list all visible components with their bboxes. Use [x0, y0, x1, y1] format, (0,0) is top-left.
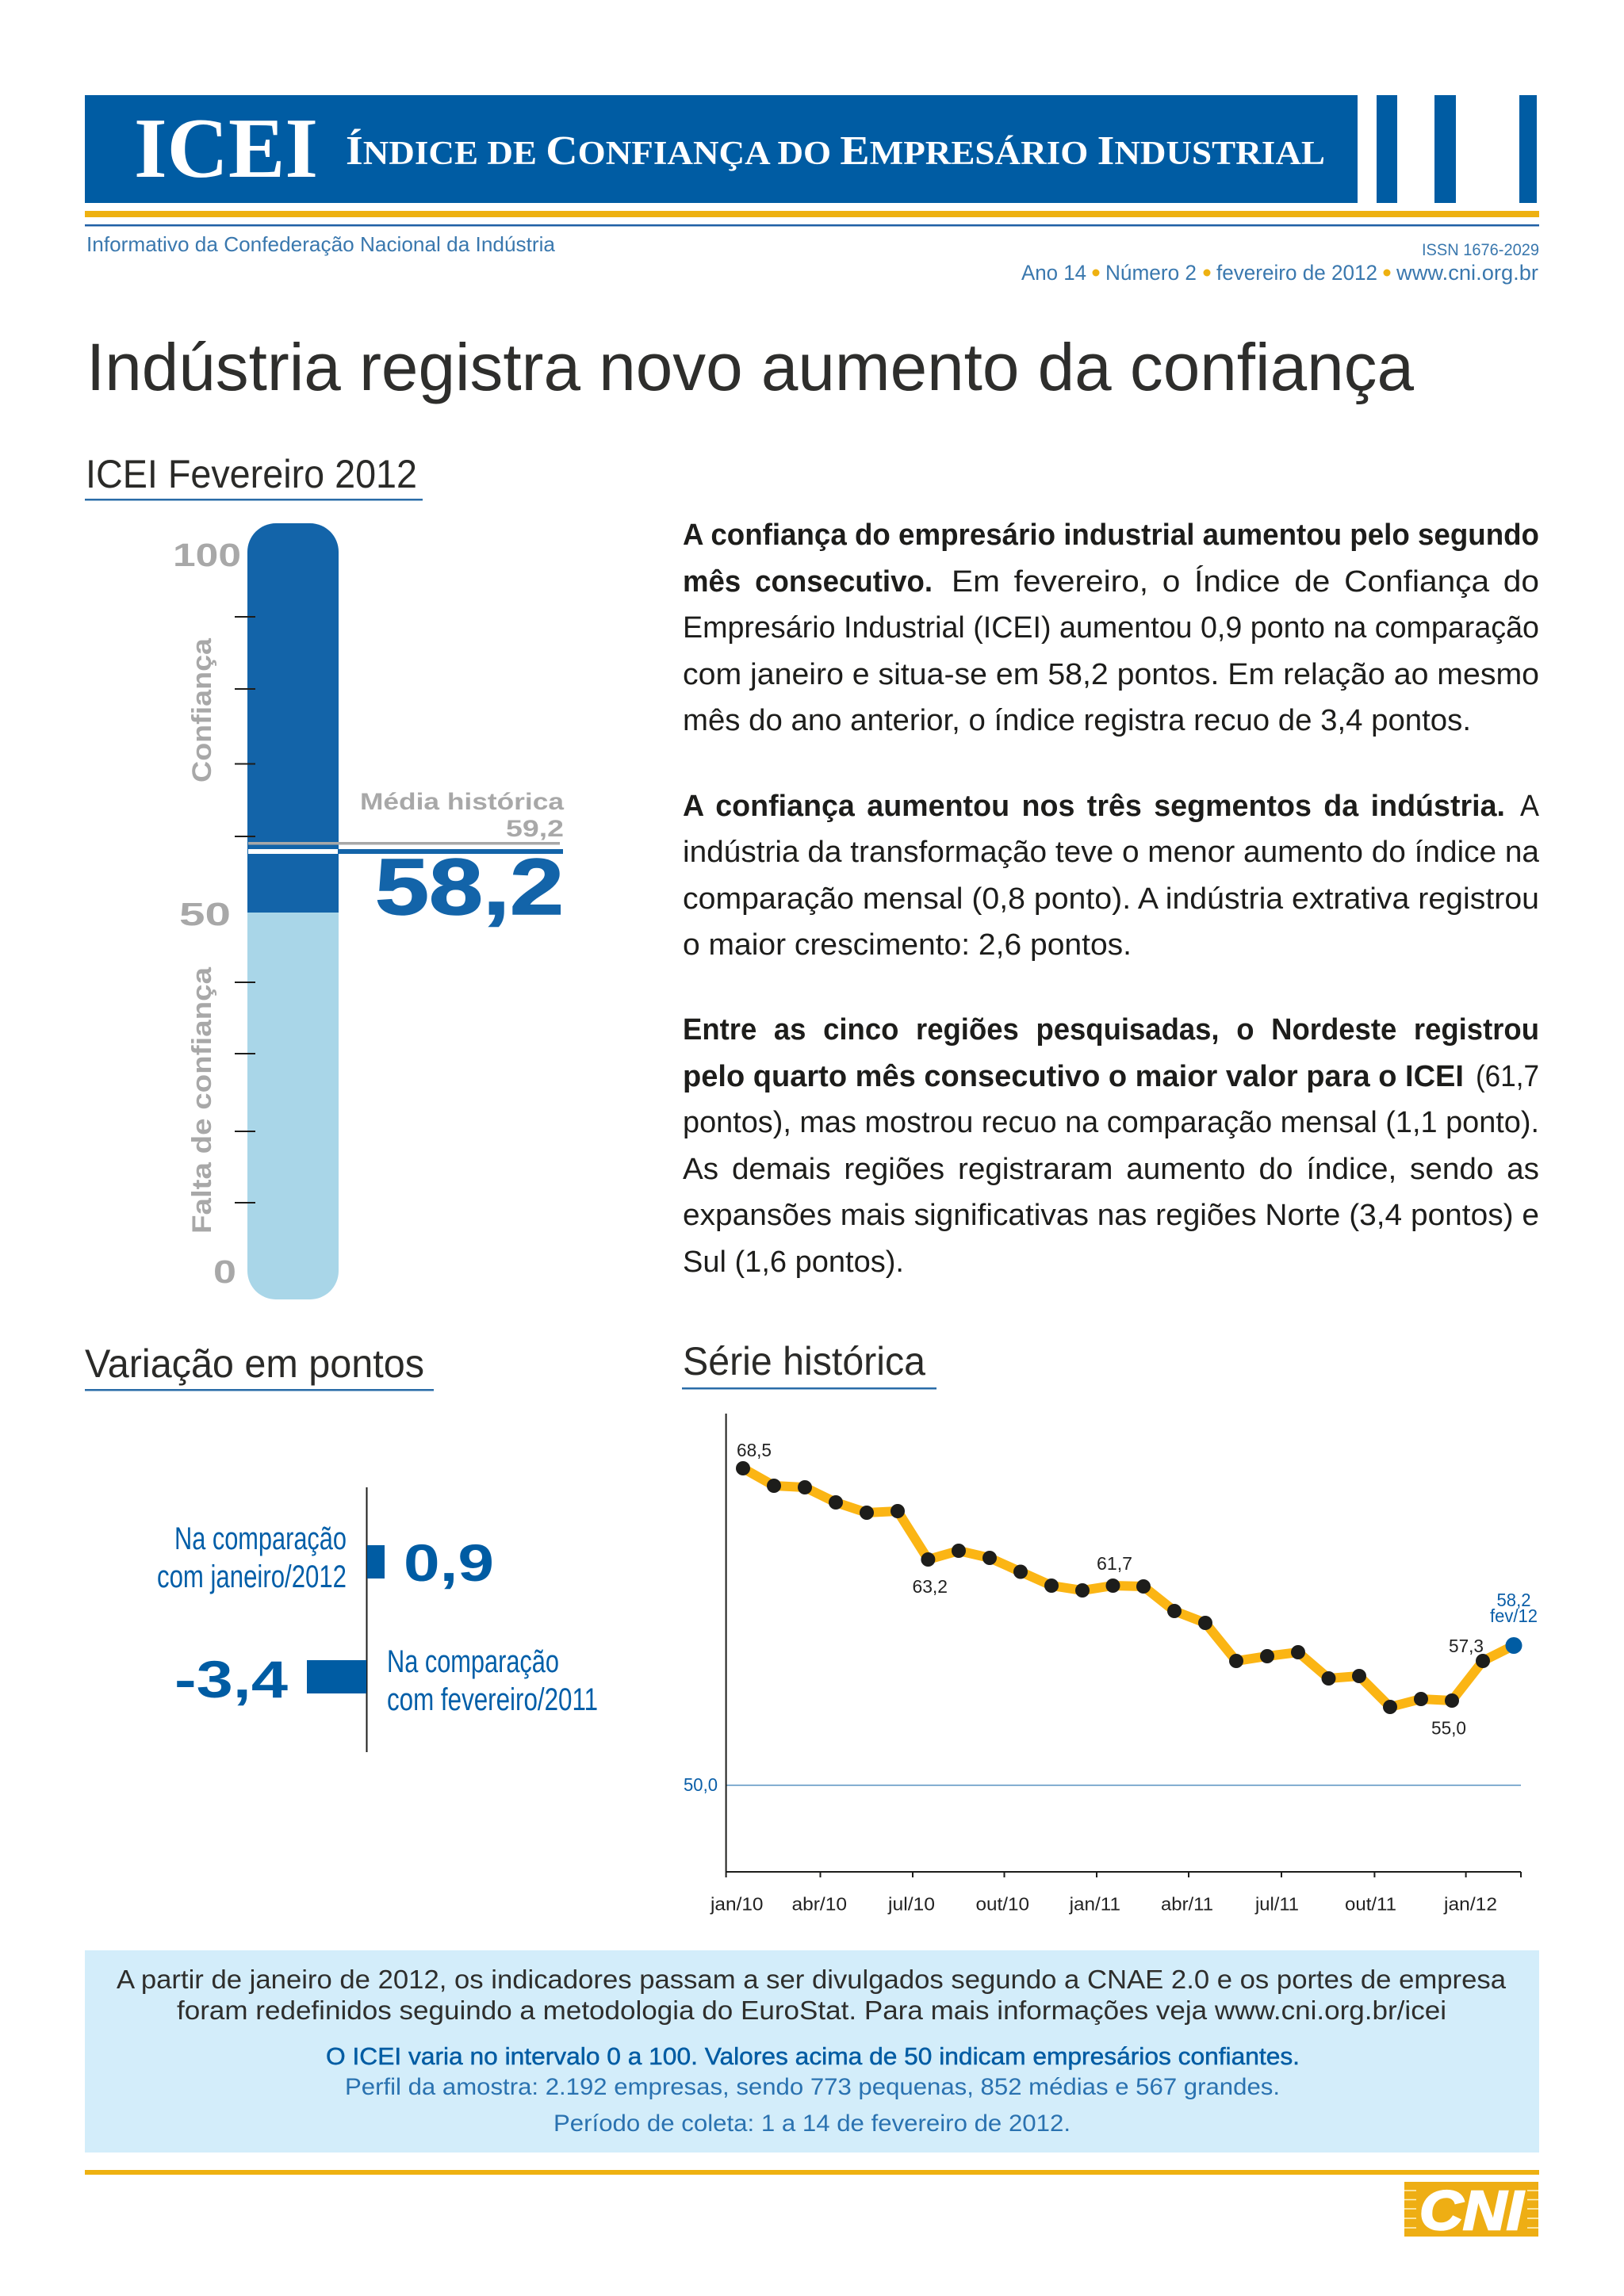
issue line	[1021, 261, 1538, 285]
data points	[736, 1461, 1490, 1714]
paragraph 3: Sul (1,6 pontos).	[683, 1246, 904, 1279]
paragraph 3: As demais regiões registraram aumento do índice, sendo as	[683, 1153, 1539, 1186]
paragraph 2: indústria da transformação teve o menor aumento do índice na	[683, 836, 1540, 869]
value 59,2: 59,2	[506, 816, 564, 842]
x axis labels: jan/10	[710, 1893, 763, 1914]
label: comparison with January 2012: Na comparação	[174, 1521, 347, 1556]
x axis labels: jul/11	[1254, 1893, 1299, 1914]
CNI logo: CNI	[1419, 2179, 1525, 2241]
data labels: 61,7	[1097, 1553, 1132, 1574]
issue line: Número 2	[1105, 261, 1197, 285]
label: comparison with January 2012	[157, 1521, 347, 1594]
thermometer gauge	[173, 523, 564, 1299]
data labels: 58,2	[1497, 1590, 1530, 1610]
current value line	[248, 849, 338, 854]
header rules	[85, 211, 1539, 227]
paragraph 3	[683, 1013, 1539, 1279]
series line	[743, 1468, 1514, 1707]
axes	[726, 1414, 1521, 1877]
main title: Indústria registra novo aumento da confiança	[86, 330, 1414, 404]
paragraph 2: A	[1520, 790, 1540, 823]
data labels: 63,2	[912, 1576, 948, 1597]
paragraph 1	[683, 519, 1539, 737]
paragraph 3: pontos), mas mostrou recuo na comparação mensal (1,1 ponto).	[683, 1106, 1539, 1139]
body text	[683, 519, 1540, 1279]
issue line: fevereiro de 2012	[1216, 261, 1377, 285]
axis label: confianca: Confiança	[187, 637, 217, 783]
paragraph 3: (61,7	[1476, 1060, 1539, 1093]
x axis labels: jul/10	[887, 1893, 935, 1914]
data labels: 50,0	[684, 1774, 718, 1795]
paragraph 3: Entre as cinco regiões pesquisadas, o Nordeste registrou	[683, 1013, 1539, 1047]
data labels: 55,0	[1431, 1717, 1466, 1738]
collection period: Período de coleta: 1 a 14 de fevereiro de 2012.	[553, 2110, 1071, 2137]
value -3,4: -3,4	[174, 1650, 288, 1709]
value 0,9: 0,9	[404, 1533, 494, 1592]
paragraph 1: com janeiro e situa-se em 58,2 pontos. Em relação ao mesmo	[683, 658, 1539, 691]
paragraph 2: comparação mensal (0,8 ponto). A indústria extrativa registrou	[683, 882, 1539, 916]
bar +0,9	[367, 1545, 385, 1578]
data labels: 57,3	[1449, 1636, 1484, 1656]
paragraph 1: Empresário Industrial (ICEI) aumentou 0,9 ponto na comparação	[683, 611, 1539, 645]
paragraph 1: A confiança do empresário industrial aumentou pelo segundo	[683, 519, 1539, 552]
footer rule	[85, 2170, 1539, 2175]
scale 100: 100	[173, 537, 241, 573]
value 58,2: 58,2	[375, 843, 564, 932]
publisher line: Informativo da Confederação Nacional da Indústria	[86, 232, 556, 256]
label: comparison with February 2011	[387, 1644, 598, 1717]
data labels	[684, 1440, 1538, 1795]
paragraph 3: expansões mais significativas nas regiões Norte (3,4 pontos) e	[683, 1199, 1539, 1232]
heading: Serie historica: Série histórica	[683, 1339, 925, 1383]
label: media historica: Média histórica	[360, 789, 564, 815]
issue line: Ano 14	[1021, 261, 1086, 285]
x axis labels: abr/10	[791, 1893, 847, 1914]
x axis labels: abr/11	[1161, 1893, 1213, 1914]
historical mean line	[248, 842, 560, 845]
paragraph 1: Em fevereiro, o Índice de Confiança do	[952, 564, 1539, 599]
heading: ICEI Fevereiro 2012: ICEI Fevereiro 2012	[86, 452, 417, 496]
data labels: fev/12	[1490, 1605, 1538, 1626]
paragraph 1: mês do ano anterior, o índice registra recuo de 3,4 pontos.	[683, 704, 1471, 737]
scale 50: 50	[179, 896, 231, 932]
label: comparison with January 2012: com janeiro/2012	[157, 1559, 347, 1594]
ISSN: ISSN 1676-2029	[1422, 241, 1539, 259]
x axis labels: jan/12	[1443, 1893, 1497, 1914]
index range note: O ICEI varia no intervalo 0 a 100. Valores acima de 50 indicam empresários confiantes.	[326, 2042, 1300, 2070]
header banner	[85, 95, 1537, 203]
diverging bar chart: variation	[157, 1487, 598, 1752]
paragraph 3: pelo quarto mês consecutivo o maior valor para o ICEI	[683, 1060, 1464, 1093]
sample profile: Perfil da amostra: 2.192 empresas, sendo 773 pequenas, 852 médias e 567 grandes.	[345, 2074, 1280, 2100]
label: comparison with February 2011: com fevereiro/2011	[387, 1682, 598, 1717]
issue line: www.cni.org.br	[1396, 261, 1538, 285]
line chart: historical series	[684, 1414, 1538, 1914]
methodology note: A partir de janeiro de 2012, os indicadores passam a ser divulgados segundo a CNAE 2.0 e os portes de empresa	[117, 1965, 1507, 1994]
info panel	[85, 1950, 1539, 2152]
x axis labels: out/10	[975, 1893, 1029, 1914]
x axis labels: jan/11	[1069, 1893, 1120, 1914]
banner title: ÍNDICE DE CONFIANÇA DO EMPRESÁRIO INDUSTRIAL	[346, 128, 1325, 174]
paragraph 1: mês consecutivo.	[683, 565, 933, 599]
x axis labels: out/11	[1345, 1893, 1396, 1914]
methodology note: foram redefinidos seguindo a metodologia do EuroStat. Para mais informações veja www.cni.org.br/icei	[177, 1996, 1446, 2025]
logotype ICEI: ICEI	[134, 101, 318, 196]
paragraph 2: A confiança aumentou nos três segmentos da indústria.	[683, 790, 1505, 823]
axis label: falta de confianca: Falta de confiança	[187, 966, 217, 1234]
scale 0: 0	[213, 1253, 236, 1290]
paragraph 2	[683, 790, 1540, 962]
x axis labels	[710, 1893, 1497, 1914]
latest point	[1505, 1637, 1522, 1654]
label: comparison with February 2011: Na comparação	[387, 1644, 559, 1679]
methodology note	[117, 1965, 1507, 2025]
paragraph 2: o maior crescimento: 2,6 pontos.	[683, 928, 1132, 962]
heading: Variacao em pontos: Variação em pontos	[85, 1341, 424, 1386]
data labels: 68,5	[737, 1440, 772, 1460]
bar -3,4	[307, 1660, 366, 1693]
